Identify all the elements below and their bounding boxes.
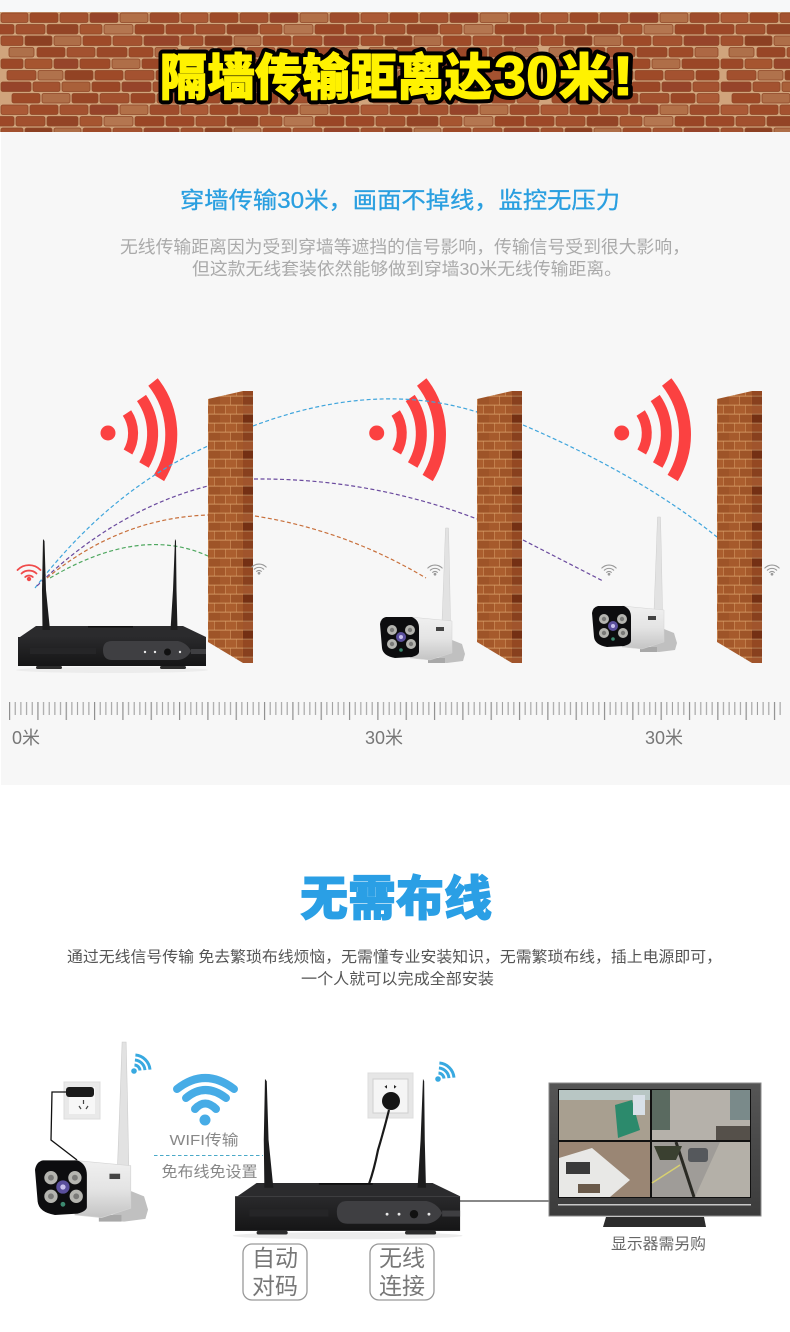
green dashed signal path <box>50 545 208 578</box>
brick wall 3 <box>717 391 762 663</box>
screen quadrant bottom right <box>652 1142 750 1197</box>
badge: auto pairing: 自动 <box>252 1245 298 1271</box>
icon: grey wifi 1 <box>252 564 266 575</box>
ruler label 30 m second: 30米 <box>645 728 683 748</box>
description text: 但这款无线套装依然能够做到穿墙30米无线传输距离。 <box>192 259 622 279</box>
wall socket with recorder plug <box>368 1073 413 1184</box>
description text 2: 一个人就可以完成全部安装 <box>301 970 494 988</box>
description text <box>120 237 690 279</box>
wireless recorder <box>16 539 208 673</box>
description text 2: 通过无线信号传输 免去繁琐布线烦恼，无需懂专业安装知识，无需繁琐布线，插上电源即可， <box>67 947 722 966</box>
ruler label 30 m: 30米 <box>365 728 403 748</box>
brick banner <box>0 12 790 132</box>
HDMI cable <box>460 1200 549 1202</box>
wireless recorder 2 <box>233 1079 462 1239</box>
brick wall 1 <box>208 391 253 663</box>
icon: grey wifi 2 <box>428 565 442 576</box>
icon: small blue wifi near camera <box>125 1052 153 1080</box>
monitor <box>549 1083 761 1227</box>
description text 2 <box>67 947 722 988</box>
badge: auto pairing: 对码 <box>252 1273 298 1299</box>
banner title: 隔墙传输距离达 <box>160 50 492 106</box>
distance ruler <box>9 702 784 748</box>
camera 1 <box>380 528 465 663</box>
purple dashed signal path <box>37 479 603 586</box>
dashed divider <box>154 1154 263 1156</box>
icon: grey wifi 4 <box>765 565 779 576</box>
badge: wireless connection: 无线 <box>379 1245 425 1271</box>
brick wall 2 <box>477 391 522 663</box>
orange dashed signal path <box>47 515 426 578</box>
badge: wireless connection: 连接 <box>379 1273 425 1299</box>
diagram: signal through walls <box>16 382 779 673</box>
badge: wireless connection <box>370 1244 434 1300</box>
description text: 无线传输距离因为受到穿墙等遮挡的信号影响，传输信号受到很大影响， <box>120 237 690 257</box>
screen quadrant bottom left <box>559 1142 650 1197</box>
icon: grey wifi 3 <box>602 565 616 576</box>
label: no wiring no setup: 免布线免设置 <box>162 1163 258 1181</box>
icon: red wifi signal 3 <box>614 382 685 478</box>
banner title: 米 <box>559 50 609 106</box>
icon: small blue wifi near socket <box>429 1060 457 1088</box>
screen quadrant top right <box>652 1090 750 1140</box>
blue dashed signal path <box>35 399 717 588</box>
icon: red wifi on recorder <box>18 565 40 581</box>
banner title: ! <box>612 44 634 107</box>
label: WIFI transfer: WIFI传输 <box>170 1132 238 1149</box>
banner title: ! <box>612 44 634 107</box>
camera 2 <box>592 517 677 652</box>
banner title: 隔墙传输距离达 <box>160 50 492 106</box>
ruler label 0 m: 0米 <box>12 728 40 748</box>
screen quadrant top left <box>559 1090 650 1140</box>
banner title: 30 <box>494 44 558 107</box>
diagram: wireless installation <box>35 1042 761 1300</box>
caption: monitor sold separately: 显示器需另购 <box>611 1235 706 1253</box>
camera 3 <box>35 1042 148 1222</box>
page background: top strip <box>0 0 790 12</box>
wall socket with camera adapter <box>51 1082 100 1160</box>
badge: auto pairing <box>243 1244 307 1300</box>
banner title: 30 <box>494 44 558 107</box>
icon: red wifi signal 2 <box>369 382 440 478</box>
banner title: 米 <box>559 50 609 106</box>
icon: red wifi signal 1 <box>100 382 171 478</box>
subheading: 穿墙传输30米，画面不掉线，监控无压力 <box>180 187 620 213</box>
heading: no wiring: 无需布线 <box>300 873 492 926</box>
panel: signal distance background <box>1 132 790 785</box>
banner title <box>160 44 634 107</box>
icon: large blue wifi <box>177 1078 234 1126</box>
